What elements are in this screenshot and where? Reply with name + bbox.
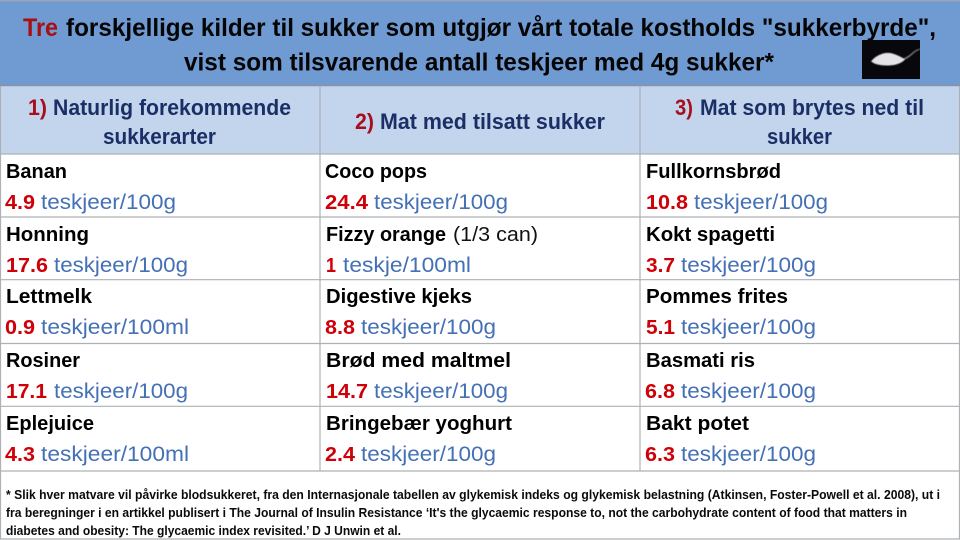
cell: Fullkornsbrød: 10.8 — [646, 191, 688, 214]
cell: Honning: Honning — [6, 223, 89, 246]
header: column 3: Mat som brytes ned til — [700, 95, 924, 120]
header: column 1 — [28, 95, 291, 149]
cell: Kokt spagetti: 3.7 — [646, 254, 675, 277]
cell: Basmati ris: Basmati ris — [646, 349, 755, 372]
column 3: foods broken down to sugar — [645, 160, 828, 466]
cell: Basmati ris: 6.8 — [645, 380, 675, 403]
cell: Eplejuice: teskjeer/100ml — [41, 443, 189, 466]
cell: Digestive kjeks: teskjeer/100g — [361, 316, 496, 339]
cell: Bringebær yoghurt: Bringebær yoghurt — [326, 412, 512, 435]
cell: Kokt spagetti — [646, 223, 816, 277]
cell: Basmati ris — [645, 349, 816, 403]
cell: Honning: teskjeer/100g — [54, 254, 188, 277]
cell: Pommes frites: 5.1 — [646, 316, 675, 339]
cell: Banan: 4.9 — [5, 191, 35, 214]
column 2: foods with added sugar — [325, 160, 538, 466]
header: column 1: 1) — [28, 95, 47, 120]
header: column 3 — [675, 95, 924, 149]
header: column 3: 3) — [675, 95, 693, 120]
cell: Brød med maltmel — [326, 349, 511, 403]
cell: Eplejuice: Eplejuice — [6, 412, 94, 435]
cell: Coco pops: 24.4 — [325, 191, 369, 214]
cell: Bringebær yoghurt: 2.4 — [325, 443, 356, 466]
title text: forskjellige kilder til sukker som utgjør vårt totale kostholds "sukkerbyrde", — [66, 14, 936, 42]
cell: Pommes frites — [646, 285, 816, 339]
cell: Fizzy orange: teskje/100ml — [343, 254, 471, 277]
cell: Bakt potet — [645, 412, 816, 466]
cell: Banan — [5, 160, 176, 214]
cell: Bakt potet: 6.3 — [645, 443, 675, 466]
cell: Fizzy orange: (1/3 can) — [453, 223, 538, 246]
cell: Rosiner — [6, 349, 188, 403]
cell: Fullkornsbrød: Fullkornsbrød — [646, 160, 781, 183]
footnote: fra beregninger i en artikkel publisert i The Journal of Insulin Resistance ‘It's the glycaemic response to, not the carbohydrate content of food that matters in — [6, 505, 907, 520]
cell: Lettmelk: teskjeer/100ml — [41, 316, 189, 339]
column headers — [0, 86, 960, 154]
column 1: naturally occurring sugars — [5, 160, 189, 466]
cell: Pommes frites: Pommes frites — [646, 285, 788, 308]
title text: vist som tilsvarende antall teskjeer med 4g sukker* — [184, 48, 774, 76]
cell: Lettmelk: Lettmelk — [6, 285, 93, 308]
cell: Coco pops — [325, 160, 508, 214]
cell: Honning: 17.6 — [6, 254, 48, 277]
cell: Digestive kjeks: Digestive kjeks — [326, 285, 472, 308]
cell: Rosiner: 17.1 — [6, 380, 47, 403]
cell: Fizzy orange: Fizzy orange — [326, 223, 446, 246]
cell: Brød med maltmel: 14.7 — [326, 380, 368, 403]
cell: Digestive kjeks: 8.8 — [325, 316, 355, 339]
cell: Coco pops: Coco pops — [325, 160, 427, 183]
cell: Fullkornsbrød: teskjeer/100g — [694, 191, 828, 214]
cell: Fullkornsbrød — [646, 160, 828, 214]
cell: Digestive kjeks — [325, 285, 496, 339]
cell: Fizzy orange: 1 — [326, 254, 336, 277]
footnote: diabetes and obesity: The glycaemic index revisited.’ D J Unwin et al. — [6, 523, 401, 538]
cell: Lettmelk — [5, 285, 189, 339]
header: column 1: sukkerarter — [103, 124, 216, 149]
cell: Eplejuice — [5, 412, 189, 466]
cell: Coco pops: teskjeer/100g — [374, 191, 508, 214]
header: column 2: 2) — [355, 109, 374, 134]
cell: Honning — [6, 223, 188, 277]
cell: Kokt spagetti: teskjeer/100g — [681, 254, 816, 277]
title text: Tre — [23, 14, 58, 42]
cell: Bakt potet: Bakt potet — [646, 412, 749, 435]
icon: teaspoon of sugar — [862, 40, 920, 79]
cell: Fizzy orange — [326, 223, 538, 277]
cell: Lettmelk: 0.9 — [5, 316, 35, 339]
cell: Kokt spagetti: Kokt spagetti — [646, 223, 775, 246]
footnote — [6, 487, 940, 538]
title text — [23, 14, 936, 76]
cell: Brød med maltmel: teskjeer/100g — [374, 380, 508, 403]
cell: Bakt potet: teskjeer/100g — [681, 443, 816, 466]
cell: Bringebær yoghurt — [325, 412, 512, 466]
cell: Bringebær yoghurt: teskjeer/100g — [361, 443, 496, 466]
cell: Eplejuice: 4.3 — [5, 443, 35, 466]
header: column 2: Mat med tilsatt sukker — [380, 109, 605, 134]
title banner — [0, 0, 960, 85]
cell: Banan: Banan — [6, 160, 67, 183]
cell: Rosiner: Rosiner — [6, 349, 80, 372]
cell: Banan: teskjeer/100g — [41, 191, 176, 214]
header: column 1: Naturlig forekommende — [53, 95, 291, 120]
cell: Brød med maltmel: Brød med maltmel — [326, 349, 511, 372]
header: column 3: sukker — [767, 124, 832, 149]
cell: Rosiner: teskjeer/100g — [54, 380, 188, 403]
cell: Pommes frites: teskjeer/100g — [681, 316, 816, 339]
cell: Basmati ris: teskjeer/100g — [681, 380, 816, 403]
